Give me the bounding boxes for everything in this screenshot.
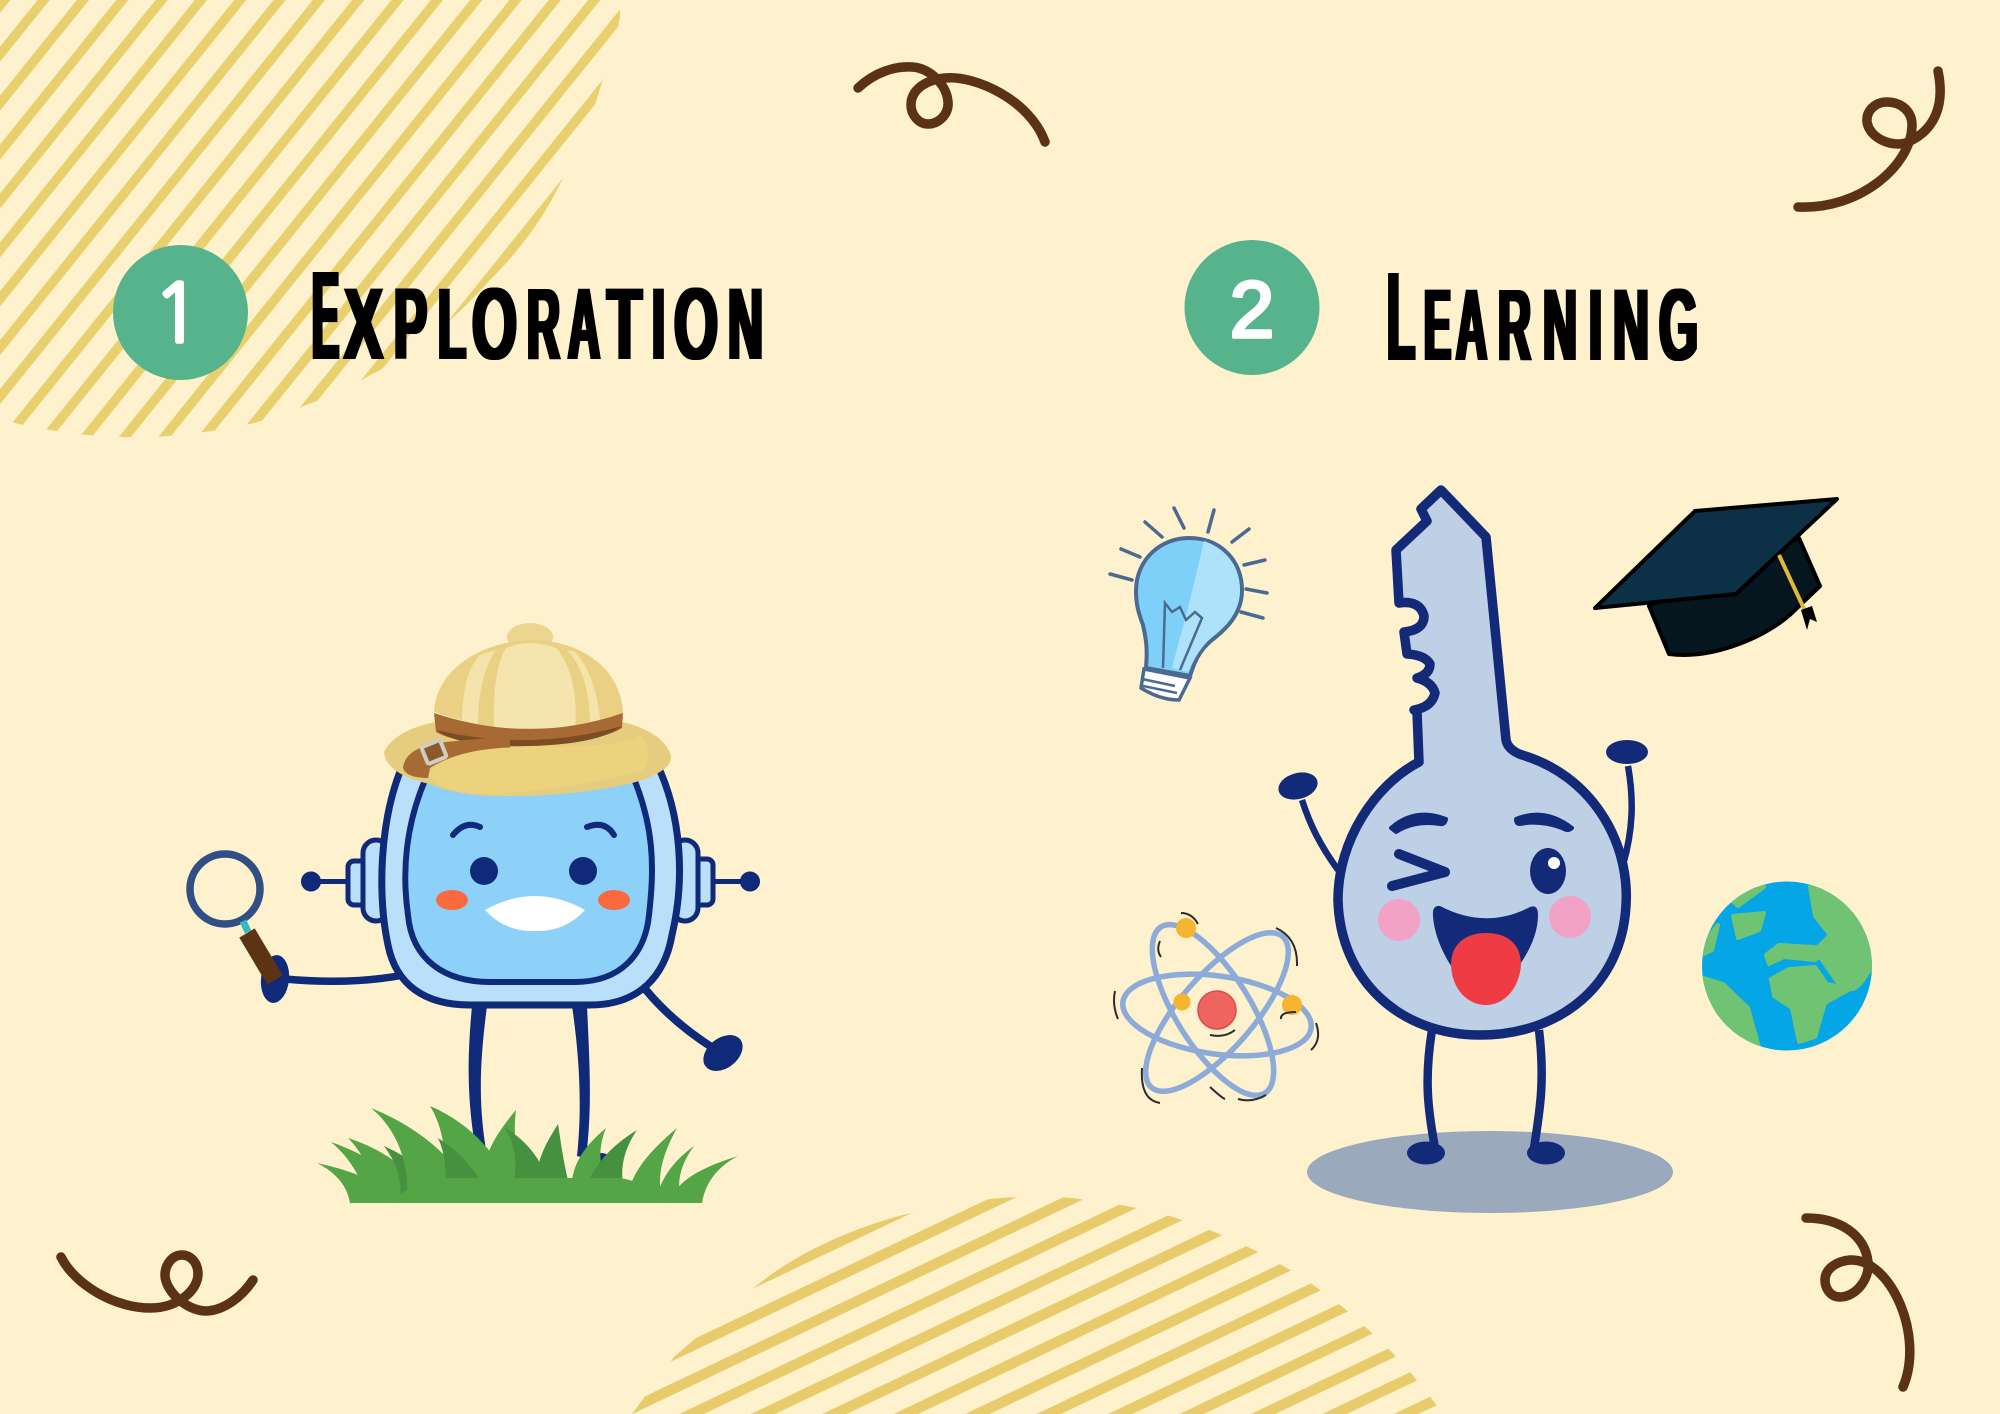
heading: Exploration: L <box>438 267 466 381</box>
heading: Exploration: O <box>674 267 718 381</box>
heading: Learning: R <box>1498 268 1531 382</box>
key face <box>1378 815 1591 1005</box>
infographic canvas: N <box>728 267 763 381</box>
heading: Learning: I <box>1589 268 1602 382</box>
ground shadow <box>1307 1131 1673 1213</box>
magnifying glass and hand <box>190 854 291 1004</box>
robot foot raised <box>696 1028 750 1078</box>
heading: Exploration: O <box>472 267 517 381</box>
icon: light bulb <box>1110 508 1267 700</box>
number badge 1: 1 <box>153 274 201 354</box>
heading: Learning: N <box>1613 268 1649 382</box>
character: key <box>1275 490 1673 1213</box>
swirl: bottom right <box>1806 1218 1910 1387</box>
heading: Learning: A <box>1456 268 1487 382</box>
character: explorer robot <box>190 623 758 1203</box>
grass <box>317 1106 738 1203</box>
icon: globe <box>1700 882 1875 1050</box>
swirl: top centre <box>858 67 1045 142</box>
key arms <box>1302 766 1632 870</box>
robot head <box>382 762 680 1005</box>
robot screen <box>405 765 652 982</box>
heading: Exploration: I <box>652 267 665 381</box>
key hands <box>1275 740 1648 804</box>
heading: Exploration: A <box>568 267 600 381</box>
infographic canvas: G <box>1659 268 1698 382</box>
number badge 2: 2 <box>1230 265 1274 354</box>
robot face <box>436 825 630 931</box>
heading: Learning: E <box>1424 268 1451 382</box>
robot left arm <box>285 975 404 981</box>
icon: graduation cap <box>1595 499 1837 655</box>
swirl: bottom left <box>61 1255 253 1311</box>
icon: atom <box>1114 907 1318 1113</box>
heading: Exploration: T <box>607 267 642 381</box>
heading: Learning: L <box>1387 246 1415 387</box>
heading: Learning: N <box>1543 268 1577 382</box>
striped blob: top left <box>0 0 620 437</box>
number badge 1 <box>113 245 248 380</box>
heading: Exploration: E <box>312 245 339 386</box>
key legs <box>1428 1030 1542 1148</box>
heading: Exploration: R <box>527 267 560 381</box>
robot legs <box>469 1006 590 1158</box>
striped blob: bottom centre <box>632 1197 1444 1414</box>
number badge 2 <box>1184 240 1320 375</box>
key body <box>1338 490 1626 1035</box>
swirl: top right <box>1798 71 1940 207</box>
robot ears <box>348 840 713 921</box>
robot feet behind grass <box>449 1153 613 1175</box>
safari hat <box>384 623 671 796</box>
key feet <box>1407 1142 1565 1164</box>
robot kicking leg <box>646 990 713 1048</box>
heading: Exploration: X <box>344 267 383 381</box>
robot antennas <box>304 874 758 889</box>
heading: Exploration: P <box>394 267 427 381</box>
